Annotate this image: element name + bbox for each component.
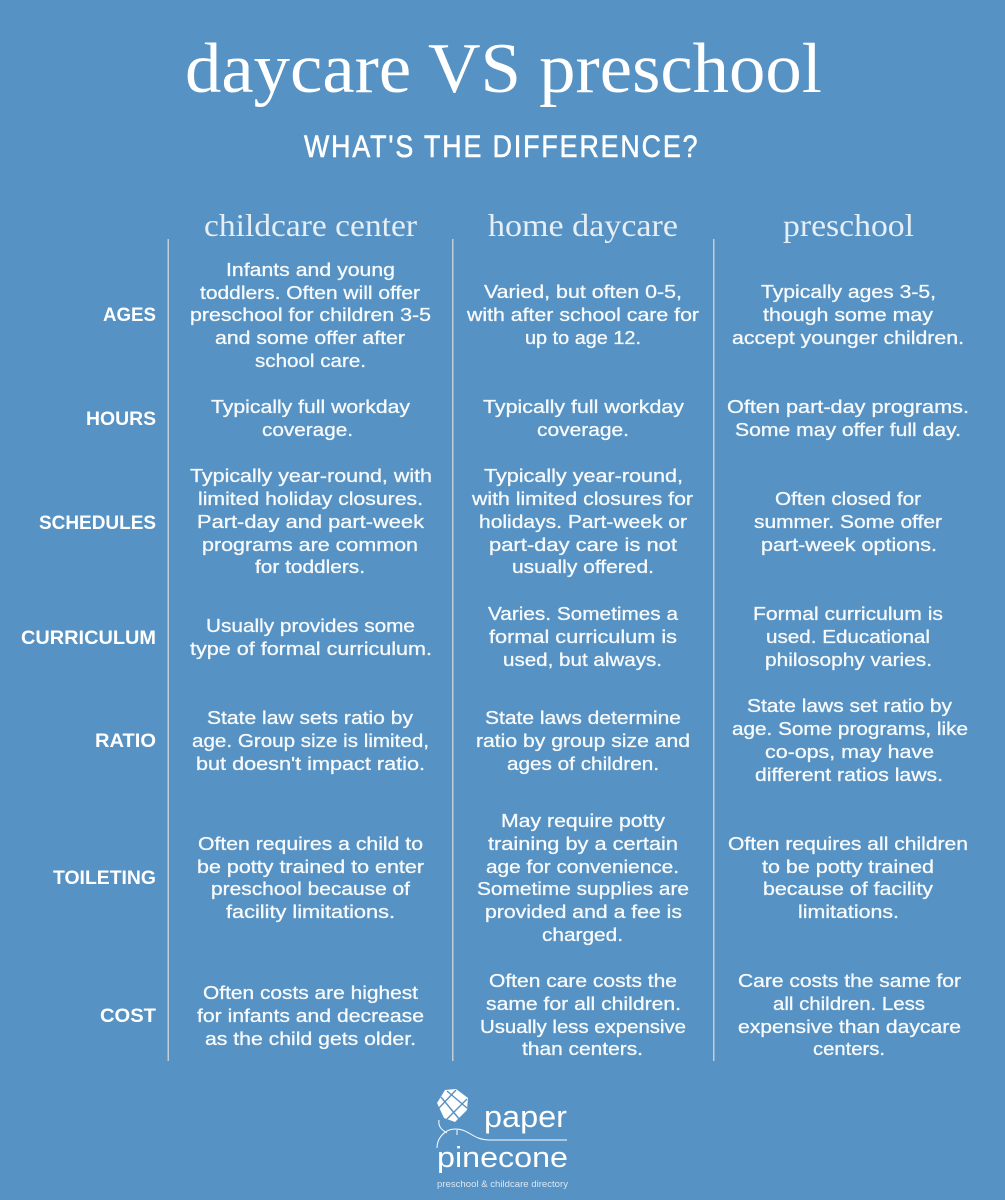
row: ratio: State laws set ratio by	[747, 695, 953, 716]
row: schedules: summer. Some offer	[754, 511, 942, 532]
row: schedules: limited holiday closures.	[198, 488, 423, 509]
column headers	[204, 207, 914, 243]
row: ages: school care.	[255, 350, 366, 371]
row: toileting: limitations.	[798, 901, 899, 922]
column headers: preschool	[783, 207, 914, 243]
row: ages: accept younger children.	[732, 327, 964, 348]
row: ages: Varied, but often 0-5,	[484, 281, 682, 302]
row: ratio: co-ops, may have	[765, 741, 934, 762]
row: curriculum: used. Educational	[766, 626, 930, 647]
row: schedules: with limited closures for	[471, 488, 693, 509]
row: ages: and some offer after	[215, 327, 405, 348]
row: curriculum	[21, 603, 943, 670]
row: curriculum: Formal curriculum is	[753, 603, 943, 624]
logo: paper pinecone: pinecone	[437, 1142, 568, 1174]
row: ages: up to age 12.	[525, 327, 641, 348]
title: daycare VS preschool	[185, 30, 822, 108]
row: cost: centers.	[813, 1038, 885, 1059]
row: curriculum: philosophy varies.	[765, 649, 932, 670]
row: toileting: because of facility	[763, 878, 934, 899]
row: toileting: charged.	[542, 924, 623, 945]
row: schedules: programs are common	[202, 534, 418, 555]
row: ages: Typically ages 3-5,	[761, 281, 936, 302]
row: schedules: Typically year-round,	[484, 465, 683, 486]
row: hours: HOURS	[86, 409, 156, 430]
row: schedules: Often closed for	[775, 488, 921, 509]
row: schedules: part-day care is not	[489, 534, 677, 555]
row: ratio: but doesn't impact ratio.	[196, 753, 425, 774]
row: ratio	[95, 695, 968, 785]
row: ratio: ratio by group size and	[476, 730, 690, 751]
row: curriculum: formal curriculum is	[489, 626, 677, 647]
row: ages	[103, 259, 964, 371]
row: cost: Often care costs the	[489, 970, 677, 991]
row: schedules: Typically year-round, with	[190, 465, 432, 486]
row: toileting: May require potty	[501, 810, 666, 831]
row: cost: all children. Less	[773, 993, 925, 1014]
row: curriculum: Varies. Sometimes a	[488, 603, 679, 624]
icon: pinecone	[437, 1089, 567, 1148]
row: toileting: be potty trained to enter	[197, 856, 424, 877]
row: schedules: Part-day and part-week	[197, 511, 425, 532]
row: cost: as the child gets older.	[205, 1028, 416, 1049]
row: hours	[86, 396, 969, 440]
row: toileting	[53, 810, 968, 945]
row: cost: Usually less expensive	[480, 1016, 686, 1037]
subtitle: WHAT'S THE DIFFERENCE?	[304, 130, 698, 165]
column headers: childcare center	[204, 207, 417, 243]
row: cost	[100, 970, 961, 1059]
row: cost: expensive than daycare	[738, 1016, 961, 1037]
row: ratio: State law sets ratio by	[207, 707, 414, 728]
row: cost: same for all children.	[486, 993, 681, 1014]
row: ratio: different ratios laws.	[755, 764, 943, 785]
row: toileting: provided and a fee is	[485, 901, 682, 922]
logo: paper pinecone: paper	[484, 1099, 567, 1134]
row: hours: Typically full workday	[483, 396, 685, 417]
row: ages: though some may	[763, 304, 934, 325]
row: schedules: part-week options.	[761, 534, 937, 555]
row: cost: Care costs the same for	[738, 970, 961, 991]
logo: paper pinecone	[437, 1089, 568, 1190]
column headers: home daycare	[488, 207, 678, 243]
row: hours: Typically full workday	[211, 396, 411, 417]
row: curriculum: CURRICULUM	[21, 628, 156, 649]
row: toileting: training by a certain	[488, 833, 678, 854]
logo: paper pinecone: preschool & childcare directory	[437, 1179, 568, 1190]
row: toileting: TOILETING	[53, 868, 156, 889]
row: schedules: holidays. Part-week or	[479, 511, 687, 532]
row: schedules	[39, 465, 942, 577]
row: hours: coverage.	[537, 419, 629, 440]
row: hours: Some may offer full day.	[735, 419, 961, 440]
row: ages: toddlers. Often will offer	[200, 282, 420, 303]
row: toileting: to be potty trained	[762, 856, 934, 877]
row: curriculum: Usually provides some	[206, 615, 415, 636]
row: toileting: age for convenience.	[486, 856, 679, 877]
row: ratio: ages of children.	[507, 753, 659, 774]
row: curriculum: used, but always.	[503, 649, 662, 670]
row: schedules: SCHEDULES	[39, 513, 156, 534]
row: hours: coverage.	[262, 419, 353, 440]
row: ages: with after school care for	[466, 304, 699, 325]
row: toileting: Often requires all children	[728, 833, 968, 854]
row: ages: preschool for children 3-5	[190, 304, 431, 325]
row: schedules: usually offered.	[512, 556, 654, 577]
row: curriculum: type of formal curriculum.	[190, 638, 432, 659]
row: toileting: preschool because of	[211, 878, 411, 899]
row: ratio: age. Some programs, like	[732, 718, 968, 739]
row: cost: Often costs are highest	[203, 982, 418, 1003]
row: ages: AGES	[103, 305, 156, 326]
row: hours: Often part-day programs.	[727, 396, 969, 417]
row: ratio: RATIO	[95, 731, 156, 752]
row: toileting: Often requires a child to	[198, 833, 423, 854]
row: ratio: State laws determine	[485, 707, 681, 728]
row: toileting: Sometime supplies are	[477, 878, 689, 899]
row: cost: for infants and decrease	[197, 1005, 424, 1026]
row: toileting: facility limitations.	[226, 901, 395, 922]
row: cost: COST	[100, 1006, 156, 1027]
row: schedules: for toddlers.	[255, 556, 365, 577]
row: ages: Infants and young	[226, 259, 395, 280]
row: cost: than centers.	[522, 1038, 643, 1059]
row: ratio: age. Group size is limited,	[192, 730, 429, 751]
